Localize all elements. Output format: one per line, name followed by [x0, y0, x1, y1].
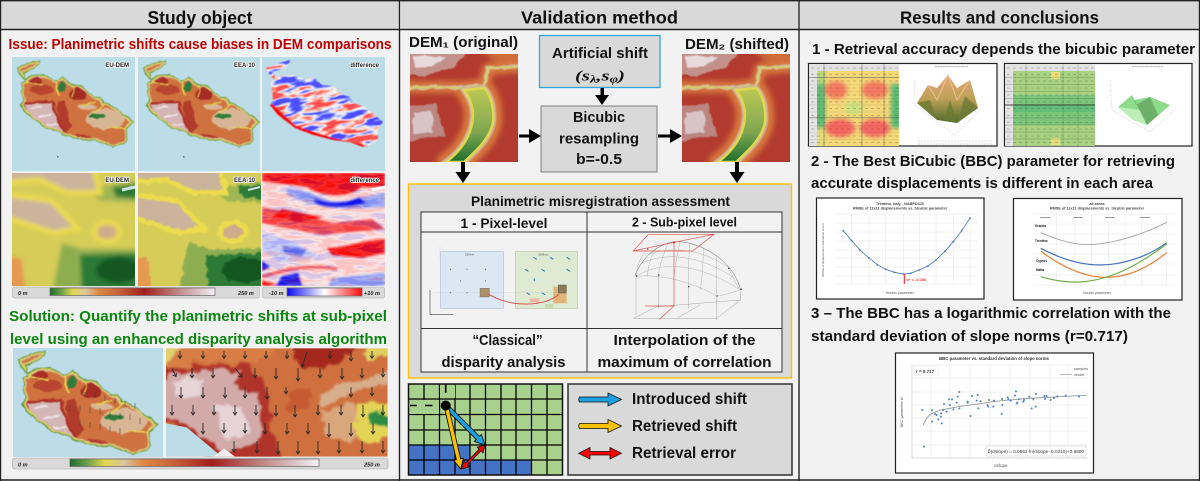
elevation colour bar: 250 m	[237, 291, 254, 297]
point: origin	[441, 400, 451, 410]
heading: finding 2: accurate displacements is different in each area	[811, 176, 1154, 192]
legend item: retrieval error	[578, 445, 736, 462]
box: bicubic resampling: Bicubic	[573, 110, 625, 126]
arrows: displacement vectors	[170, 351, 385, 454]
arrow: retrieval error	[462, 445, 485, 469]
label: DEM1: DEM₁ (original)	[409, 35, 518, 51]
map: difference zoom	[262, 173, 385, 286]
chart: RMSE vs bicubic parameter, Trentino	[816, 198, 984, 299]
caption: interpolation of maximum: maximum of correlation	[598, 355, 772, 371]
panel: planimetric misregistration assessment	[408, 184, 792, 378]
chart: RMSE vs bicubic parameter, Trentino: RMSE of displacement estimation errors	[821, 223, 825, 277]
bottom colour bar: 250 m	[363, 462, 380, 468]
map: difference island: difference	[350, 63, 380, 69]
box: bicubic resampling: resampling	[559, 132, 639, 148]
header: study object	[1, 1, 399, 29]
map: EEA-10 island: EEA-10	[234, 63, 256, 69]
arrow: resampling to DEM2	[658, 129, 682, 143]
map: EU-DEM island	[12, 57, 135, 171]
difference colour bar: -10 m	[269, 291, 284, 297]
legend item: introduced shift	[579, 391, 747, 408]
header: results: Results and conclusions	[900, 8, 1099, 28]
chart: RMSE vs bicubic parameter, all areas: all areas	[1089, 202, 1105, 206]
chart: RMSE vs bicubic parameter, all areas: Trentino	[1035, 239, 1048, 243]
caption: classical disparity analysis: “Classical”	[472, 332, 542, 349]
chart: BBC parameter scatter plot: BBC parameter vs. standard deviation of slope norms	[939, 356, 1050, 361]
arrow: DEM1 to resampling	[519, 129, 541, 143]
map: EU-DEM island: EU-DEM	[105, 63, 129, 69]
map: zoomed displacement field	[166, 348, 388, 457]
heading: assessment: Planimetric misregistration assessment	[471, 194, 731, 209]
table: assessment methods	[421, 212, 782, 372]
chart: BBC parameter scatter plot: BBC parameter b*	[900, 396, 904, 427]
legend item: retrieval error: Retrieval error	[632, 445, 736, 462]
map: island with displacement arrows	[13, 348, 163, 457]
heading: finding 3: standard deviation of slope norms (r=0.717)	[811, 329, 1128, 345]
chart: heatmap and surface, green	[1004, 64, 1192, 146]
cell heading: pixel-level: 1 - Pixel-level	[460, 216, 548, 231]
image: shifted DEM	[682, 54, 790, 162]
heading: issue: Issue: Planimetric shifts cause biases in DEM comparisons	[8, 37, 392, 53]
bottom colour bar: 0 m	[18, 462, 28, 468]
heading: finding 3	[811, 306, 1171, 345]
map: difference island	[262, 57, 385, 171]
box: bicubic resampling: b=-0.5	[576, 152, 622, 168]
box: artificial shift: ,s	[595, 68, 610, 84]
panel: study object	[1, 1, 439, 470]
chart: RMSE vs bicubic parameter, all areas	[1014, 198, 1182, 300]
chart: BBC parameter scatter plot: r = 0.717	[916, 369, 935, 374]
map: EU-DEM zoom: EU-DEM	[105, 178, 129, 184]
box: artificial shift: )	[615, 68, 625, 84]
arrow: shift to resampling	[595, 88, 609, 105]
image: original DEM	[410, 54, 518, 162]
arrow: DEM1 to assessment	[456, 162, 470, 183]
heading: finding 2: 2 - The Best BiCubic (BBC) parameter for retrieving	[811, 154, 1175, 170]
caption: interpolation of maximum	[598, 333, 772, 371]
box: artificial shift: Artificial shift	[552, 46, 648, 62]
chart: BBC parameter scatter plot: σslope	[994, 463, 1008, 468]
elevation colour bar: 0 m	[18, 291, 28, 297]
chart: BBC parameter scatter plot: b̂(σslope) = 0.0562·ln(σslope−0.0210)+0.6800	[988, 449, 1085, 454]
heading: solution: level using an enhanced disparity analysis algorithm	[10, 332, 387, 348]
chart: RMSE vs bicubic parameter, Trentino: RMSE of 11x11 displacements vs. bicubic parameter	[853, 206, 948, 210]
chart: RMSE vs bicubic parameter, Trentino: bicubic parameter	[886, 291, 915, 295]
diagram: pixel grid with shift arrows	[408, 384, 562, 475]
chart: RMSE vs bicubic parameter, all areas: RMSE of 11x11 displacements vs. bicubic parameter	[1050, 206, 1145, 210]
header: validation method: Validation method	[521, 8, 678, 28]
arrow: retrieved shift	[445, 408, 463, 469]
legend item: introduced shift: Introduced shift	[632, 391, 747, 408]
diagram: sub-pixel correlation surface	[633, 234, 742, 320]
difference colour bar: +10 m	[364, 291, 380, 297]
map: difference zoom: difference	[350, 178, 380, 184]
legend item: retrieved shift	[579, 418, 737, 435]
heading: finding 3: 3 – The BBC has a logarithmic correlation with the	[811, 306, 1171, 322]
panel: validation method	[401, 1, 798, 475]
chart: heatmap and surface, red	[808, 64, 997, 148]
box: artificial shift	[540, 36, 660, 88]
chart: RMSE vs bicubic parameter, all areas: bicubic parameter	[1083, 291, 1112, 295]
panel: results and conclusions	[800, 1, 1199, 473]
chart: BBC parameter scatter plot: samples	[1074, 367, 1088, 371]
arrow: introduced shift	[445, 405, 485, 445]
map: EEA-10 island	[138, 57, 260, 171]
map: EEA-10 zoom: EEA-10	[234, 178, 256, 184]
header: results	[800, 1, 1199, 29]
heading: finding 1: 1 - Retrieval accuracy depends the bicubic parameter	[812, 42, 1195, 58]
heading: solution: Solution: Quantify the planimetric shifts at sub-pixel	[9, 309, 387, 325]
box: artificial shift: λ	[589, 74, 597, 86]
chart: BBC parameter scatter plot: model	[1074, 373, 1084, 377]
map: EU-DEM zoom	[12, 173, 136, 286]
chart: RMSE vs bicubic parameter, all areas: Cyprus	[1036, 259, 1047, 263]
box: artificial shift: (s	[575, 68, 585, 84]
caption: interpolation of maximum: Interpolation of the	[614, 333, 756, 349]
box: artificial shift: φ	[610, 74, 618, 86]
chart: BBC parameter scatter plot	[896, 353, 1094, 473]
diagram: pixel-level disparity: DEMref	[465, 252, 474, 256]
chart: RMSE vs bicubic parameter, all areas: Graubs	[1035, 224, 1046, 228]
cell heading: sub-pixel level: 2 - Sub-pixel level	[632, 216, 737, 230]
legend item: retrieved shift: Retrieved shift	[632, 418, 737, 435]
legend: arrow meanings	[568, 384, 792, 475]
heading: finding 2	[811, 154, 1175, 192]
heading: solution	[9, 309, 387, 348]
box: bicubic resampling	[541, 106, 657, 172]
chart: RMSE vs bicubic parameter, Trentino: Trentino, Italy - NABPD320	[876, 202, 924, 206]
chart: RMSE vs bicubic parameter, all areas: Malta	[1036, 268, 1044, 272]
chart: RMSE vs bicubic parameter, Trentino: b* = -0.280	[906, 277, 927, 282]
diagram: pixel-level disparity: DEMsec	[538, 252, 549, 256]
bottom colour bar	[12, 458, 388, 469]
header: study object: Study object	[148, 8, 252, 28]
header: validation method	[401, 1, 798, 29]
label: DEM2: DEM₂ (shifted)	[685, 37, 789, 53]
caption: classical disparity analysis	[442, 332, 566, 371]
caption: classical disparity analysis: disparity analysis	[442, 355, 566, 371]
elevation colour bar	[12, 287, 260, 298]
arrow: DEM2 to assessment	[730, 162, 744, 183]
map: EEA-10 zoom	[138, 173, 261, 286]
diagram: pixel-level disparity	[430, 247, 577, 314]
difference colour bar	[262, 287, 384, 298]
